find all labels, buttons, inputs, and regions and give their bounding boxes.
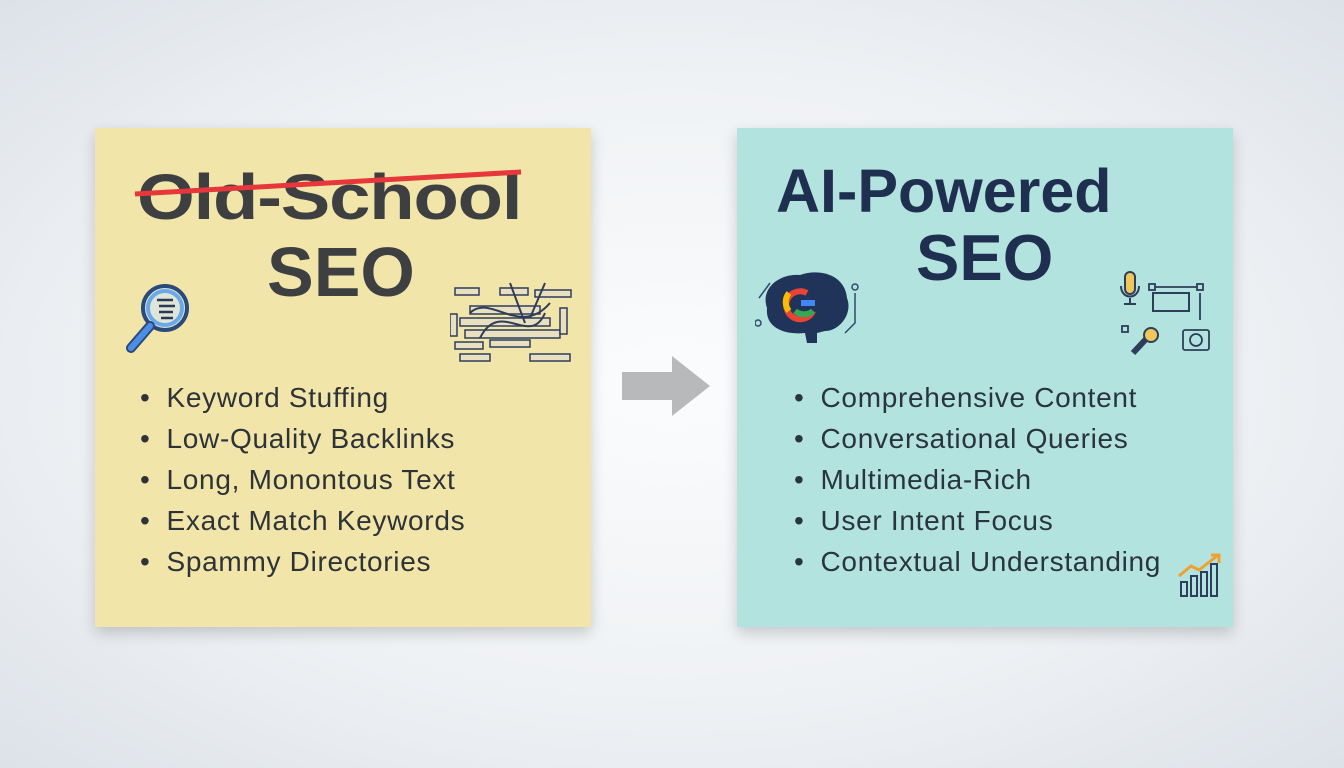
title: AI-Powered: AI-Powered bbox=[776, 157, 1112, 225]
panel: AI-powered SEO bbox=[737, 128, 1233, 627]
icon: brain with G bbox=[755, 272, 859, 343]
panel: old-school SEO bbox=[95, 128, 591, 627]
icon: magnifier bbox=[126, 284, 189, 353]
list: old-school tactics: Exact Match Keywords bbox=[167, 505, 465, 536]
list: AI-powered features: Conversational Queries bbox=[821, 423, 1129, 454]
title: SEO: SEO bbox=[916, 221, 1053, 294]
list: old-school tactics: Keyword Stuffing bbox=[167, 382, 389, 413]
list: old-school tactics: Low-Quality Backlinks bbox=[167, 423, 455, 454]
list: AI-powered features: Multimedia-Rich bbox=[821, 464, 1032, 495]
arrow bbox=[622, 356, 710, 416]
title: Old-School: Old-School bbox=[137, 161, 521, 233]
red strike line bbox=[134, 170, 522, 196]
list: old-school tactics: Spammy Directories bbox=[167, 546, 431, 577]
list: AI-powered features: Comprehensive Content bbox=[821, 382, 1137, 413]
icon: growth chart bbox=[1178, 554, 1220, 597]
icon: multimedia bbox=[1120, 271, 1210, 355]
list: AI-powered features: User Intent Focus bbox=[821, 505, 1053, 536]
icon: tangled links bbox=[450, 282, 572, 362]
list: AI-powered features: Contextual Understanding bbox=[821, 546, 1161, 577]
list: old-school tactics bbox=[141, 382, 465, 577]
list: old-school tactics: Long, Monontous Text bbox=[167, 464, 456, 495]
list: AI-powered features bbox=[795, 382, 1161, 577]
title: SEO: SEO bbox=[267, 233, 415, 311]
